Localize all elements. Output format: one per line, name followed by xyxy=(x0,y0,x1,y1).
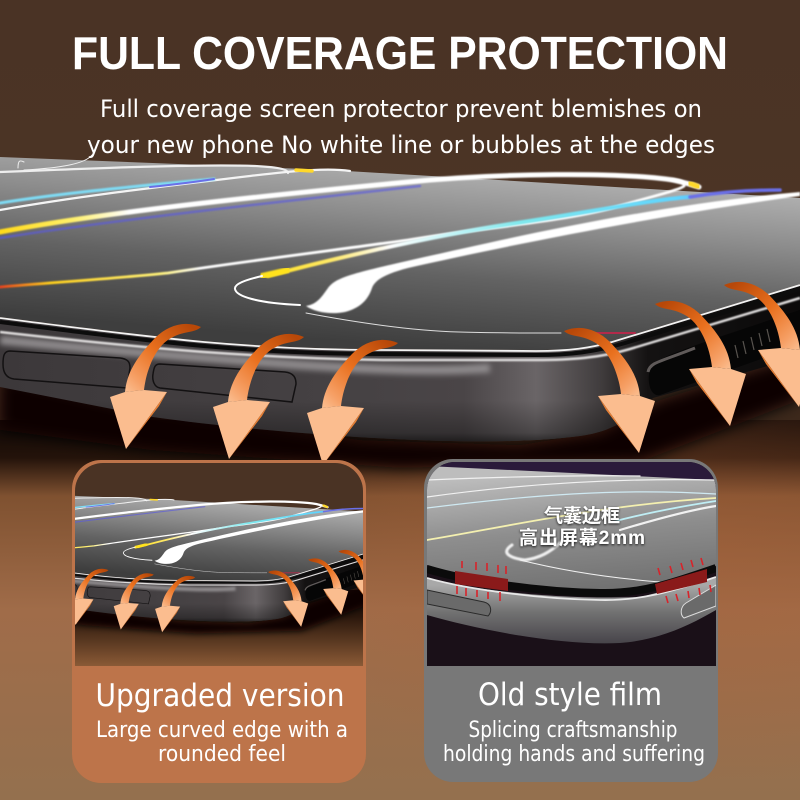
panel photo xyxy=(75,463,363,666)
old streaks xyxy=(427,476,716,582)
old phone body xyxy=(427,578,716,643)
iridescent streaks xyxy=(0,155,780,333)
body shading and highlights xyxy=(0,340,800,450)
curved arrow 2 xyxy=(213,334,304,459)
glass edge highlight xyxy=(0,285,800,351)
panel description xyxy=(96,718,348,767)
red arrows xyxy=(457,558,711,603)
subtitle: your new phone No white line or bubbles at the edges xyxy=(87,131,715,159)
panel frame xyxy=(424,459,718,782)
volume buttons xyxy=(3,351,296,402)
panel frame xyxy=(72,460,366,783)
black gasket line and white rim xyxy=(0,289,800,360)
curved arrow 1 xyxy=(110,324,201,449)
old glass xyxy=(427,466,716,590)
panel description: Large curved edge with a xyxy=(96,718,348,743)
curved arrow 6 xyxy=(724,282,800,407)
curved arrow 4 xyxy=(564,328,655,453)
panel photo xyxy=(427,462,716,666)
subtitle: Full coverage screen protector prevent blemishes on xyxy=(100,95,702,123)
panel heading: Old style film xyxy=(478,677,662,713)
chinese overlay note xyxy=(519,501,645,549)
panel heading: Upgraded version xyxy=(96,678,344,714)
curved arrow 5 xyxy=(655,301,746,426)
panel description xyxy=(443,718,705,767)
chinese overlay note: 高出屏幕2mm xyxy=(519,526,645,549)
panel: old style film xyxy=(424,459,718,782)
white ribbon swoosh xyxy=(306,192,800,313)
button right xyxy=(681,585,716,618)
raised black edge xyxy=(427,568,716,593)
panel: upgraded version xyxy=(72,460,366,783)
speaker grille and port xyxy=(648,310,800,395)
panel description: holding hands and suffering xyxy=(443,742,705,767)
white rim xyxy=(427,577,716,600)
subtitle xyxy=(87,95,715,159)
phone shadow xyxy=(0,355,800,468)
chinese overlay note: 气囊边框 xyxy=(544,501,620,528)
red gap highlight left xyxy=(455,571,508,591)
curved arrow 3 xyxy=(307,340,398,465)
button left xyxy=(427,590,491,616)
phone body xyxy=(0,285,800,441)
panel description: rounded feel xyxy=(158,742,286,767)
red gap highlight right xyxy=(655,569,707,594)
phone scene with orange arrows xyxy=(0,155,800,468)
glass screen xyxy=(0,157,800,350)
purple backdrop xyxy=(427,462,716,486)
title: FULL COVERAGE PROTECTION xyxy=(72,27,728,79)
panel description: Splicing craftsmanship xyxy=(468,718,678,743)
